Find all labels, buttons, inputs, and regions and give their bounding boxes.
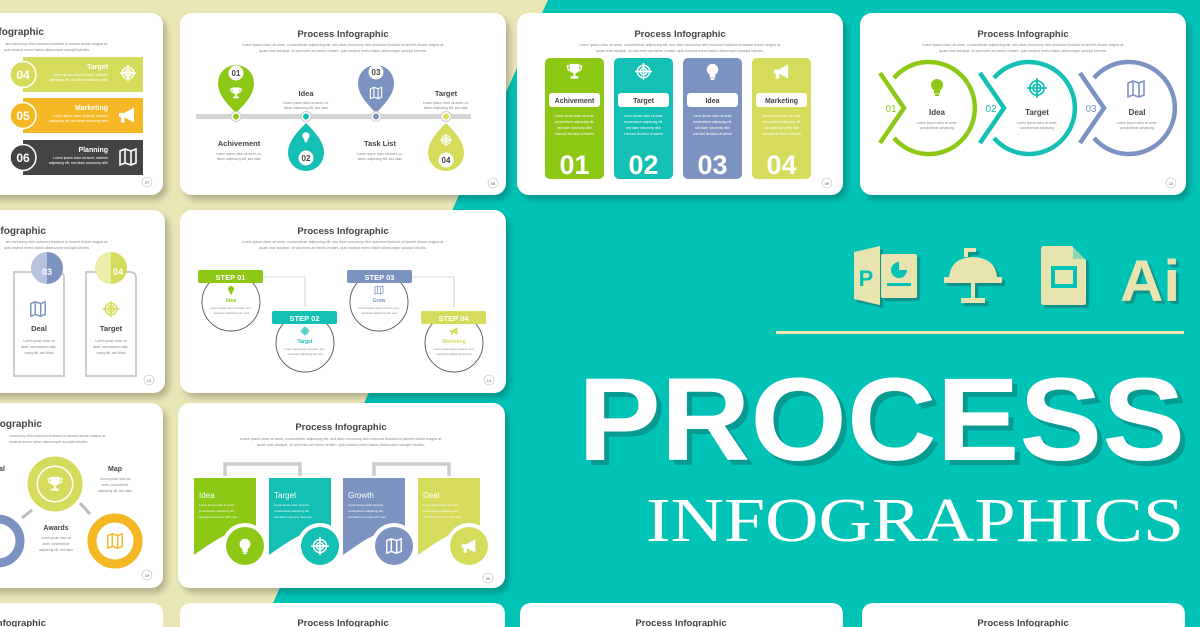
- row: 06 Planning: adipiscing elit, sed diam nonummy nibh: [49, 161, 108, 165]
- card: slide 14 steps: Process Infographic: [297, 226, 389, 237]
- item 04 Target: amet, consectetuer adip-: [93, 345, 129, 349]
- card: slide 09 columns: Lorem ipsum dolor sit amet,: [624, 114, 663, 118]
- pin 01: [218, 65, 254, 113]
- card: slide 10 circles: 01: [885, 104, 897, 115]
- column 02: Target: [633, 98, 655, 105]
- subtitle: INFOGRAPHICS: INFOGRAPHICS: [646, 487, 1184, 555]
- row: 04 Target: adipiscing elit, sed diam nonummy nibh: [49, 78, 108, 82]
- item 04 Target: [86, 252, 136, 376]
- icon: powerpoint: P: [859, 266, 873, 291]
- card: slide 19 (left partial): nostrud exerci tation ullamcorper suscipit lobortis.: [9, 440, 88, 444]
- step 04: STEP 04: [439, 314, 469, 323]
- card: slide 20 panels: Lorem ipsum dolor sit amet,: [348, 503, 384, 507]
- row: 06 Planning: Lorem ipsum dolor sit amet, coletuer: [53, 156, 109, 160]
- card: slide 12 (left partial): quis nostrud exerci tation ullamcorper suscipit lobortis.: [4, 246, 90, 250]
- card: slide 10 circles: [860, 13, 1186, 195]
- row: 04 Target: [10, 57, 143, 92]
- panel Growth: Growth: [348, 491, 374, 500]
- step 03: Grow: [373, 298, 385, 304]
- card: slide 09 columns: Lorem ipsum dolor sit amet,: [555, 114, 594, 118]
- panel Idea: [194, 478, 268, 569]
- step 04: [421, 311, 486, 372]
- row: 06 Planning: 06: [16, 151, 30, 165]
- card: slide 10 circles: Idea: [929, 108, 946, 117]
- icon: google slides: [1041, 246, 1086, 305]
- card: slide 08 timeline: Lorem ipsum dolor sit amet, co-: [357, 152, 403, 156]
- card: slide 10 circles: 10: [1169, 181, 1174, 186]
- card: slide 19 (left partial): amet, consectetuer: [101, 483, 129, 487]
- circle 02 Target: [980, 62, 1075, 154]
- card: slide 12 (left partial): [0, 210, 165, 393]
- step 04: Lorem ipsum dolor sit amet, con-: [434, 347, 474, 351]
- column 01: 01: [559, 150, 590, 180]
- card: slide 19 (left partial): amet, consectetuer: [42, 542, 70, 546]
- card: slide 20 panels: consectetuer adipiscing elit,: [199, 509, 235, 513]
- card: slide 20 panels: consectetuer adipiscing elit,: [348, 509, 384, 513]
- column 02: 02: [628, 150, 659, 180]
- card: slide 10 circles: Deal: [1129, 108, 1145, 117]
- column 01: [545, 58, 604, 180]
- labels: Task List: [364, 139, 396, 148]
- card: slide 20 panels: Process Infographic: [295, 422, 387, 433]
- labels: Target: [435, 89, 458, 98]
- item 03 Deal: 03: [42, 267, 52, 277]
- step 02: Lorem ipsum dolor sit amet, con-: [285, 347, 325, 351]
- card: slide 19 (left partial): adipiscing elit, sed diam: [98, 489, 132, 493]
- card: slide 10 circles: consectetuer adipiscing: [920, 126, 954, 130]
- icon: powerpoint: [854, 246, 917, 305]
- step 01: Idea: [226, 298, 236, 304]
- step 02: Target: [298, 339, 313, 345]
- column 04: 04: [766, 150, 797, 180]
- card: slide 14 steps: [180, 210, 506, 393]
- card: slide 20 panels: sed diam nonummy nibh euis-: [423, 515, 462, 519]
- step 01: sectetuer adipiscing elit, sed: [213, 311, 249, 315]
- card: slide 09 columns: sed diam nonummy nibh: [764, 126, 799, 130]
- step 03: [347, 270, 412, 331]
- card: slide 09 columns: Lorem ipsum dolor sit amet, consectetuer adipiscing elit, sed diam nonummy nibh euismod tincidunt ut laoreet dolore magna al-: [579, 43, 782, 47]
- card: slide 10 circles: Process Infographic: [977, 29, 1069, 40]
- card: slide 10 circles: Lorem ipsum dolor sit amet,: [1017, 121, 1057, 125]
- row: 05 Marketing: adipiscing elit, sed diam nonummy nibh: [49, 119, 108, 123]
- item 03 Deal: Deal: [31, 324, 47, 333]
- row: 06 Planning: [10, 140, 143, 175]
- item 04 Target: 04: [113, 267, 123, 277]
- column 02: [614, 58, 673, 180]
- background: beige left area: [0, 0, 548, 627]
- card: slide 20 panels: [178, 403, 505, 588]
- card: slide 08 timeline: Process Infographic: [297, 29, 389, 40]
- card: slide 19 (left partial): 19: [145, 573, 150, 578]
- labels: Idea: [298, 89, 314, 98]
- card: slide 20 panels: 20: [486, 576, 491, 581]
- card: slide 09 columns: Lorem ipsum dolor sit amet,: [762, 114, 801, 118]
- panel Idea: Idea: [199, 491, 215, 500]
- card: slide 19 (left partial): Map: [108, 466, 122, 473]
- card: slide 14 steps: 14: [487, 378, 492, 383]
- card: slide 20 panels: sed diam nonummy nibh euis-: [199, 515, 238, 519]
- card: slide 08 timeline: quam erat volutpat. Ut wisi enim ad minim veniam, quis nostrud exerci tation ullamcorper suscipit lobortis.: [259, 49, 427, 53]
- row: 06 Planning: Planning: [78, 147, 108, 154]
- card: slide 10 circles: Lorem ipsum dolor sit amet,: [917, 121, 957, 125]
- icon: keynote: [944, 250, 1002, 303]
- card: slide 08 timeline: Lorem ipsum dolor sit amet, co-: [283, 101, 329, 105]
- card: slide 19 (left partial): Awards: [43, 525, 69, 532]
- circle 01 Idea: [880, 62, 975, 154]
- row: 04 Target: Lorem ipsum dolor sit amet, coletuer: [53, 73, 109, 77]
- pin 02: [288, 123, 324, 171]
- card: slide 20 panels: quam erat volutpat. Ut wisi enim ad minim veniam, quis nostrud exerci tation ullamcorper suscipit lobortis.: [257, 443, 425, 447]
- card: slide 09 columns: sed diam nonummy nibh: [695, 126, 730, 130]
- row: 04 Target: Target: [87, 64, 109, 71]
- ring: awards trophy: [32, 461, 78, 507]
- card: slide 14 steps: Lorem ipsum dolor sit amet, consectetuer adipiscing elit, sed diam nonummy nibh euismod tincidunt ut laoreet dolore magna al-: [242, 240, 445, 244]
- card: slide 20 panels: sed diam nonummy nibh euis-: [274, 515, 313, 519]
- panel Target: [269, 478, 343, 569]
- card: slide 20 panels: consectetuer adipiscing elit,: [423, 509, 459, 513]
- card: slide 20 panels: consectetuer adipiscing elit,: [274, 509, 310, 513]
- item 03 Deal: iscing elit, sed diam: [25, 351, 54, 355]
- circle 03 Deal: [1080, 62, 1175, 154]
- row: 04 Target: 04: [16, 68, 30, 82]
- card: slide 09 columns: Process Infographic: [634, 29, 726, 40]
- panel Deal: [418, 478, 492, 569]
- card: slide 10 circles: Lorem ipsum dolor sit amet,: [1117, 121, 1157, 125]
- labels: Achivement: [218, 139, 261, 148]
- divider line: [776, 331, 1184, 334]
- card: slide 19 (left partial): nonummy nibh euismod tincidunt ut laoreet dolore magna al-: [10, 434, 107, 438]
- card: slide 10 circles: consectetuer adipiscing: [1020, 126, 1054, 130]
- row: 05 Marketing: 05: [16, 109, 30, 123]
- card: slide 19 (left partial): [0, 403, 163, 588]
- card: slide 19 (left partial): Lorem ipsum dolor sit: [100, 477, 130, 481]
- step 02: [272, 311, 337, 372]
- card: slide 20 panels: Lorem ipsum dolor sit amet, consectetuer adipiscing elit, sed diam nonummy nibh euismod tincidunt ut laoreet dolore magna al-: [240, 437, 443, 441]
- card: slide 09 columns: euismod tincidunt ut laoreet: [624, 132, 663, 136]
- step 04: Marketing: [442, 339, 466, 345]
- card: slide 07 (left partial): quis nostrud exerci tation ullamcorper suscipit lobortis.: [4, 48, 90, 52]
- software icons: [854, 246, 1180, 314]
- panel Deal: Deal: [423, 491, 440, 500]
- step 01: [198, 270, 263, 331]
- card: slide 08 timeline: tetuer adipiscing elit, sed diam: [358, 157, 402, 161]
- card: slide 10 circles: Target: [1025, 108, 1049, 117]
- card: slide 09 columns: quam erat volutpat. Ut wisi enim ad minim veniam, quis nostrud exerci tation ullamcorper suscipit lobortis.: [596, 49, 764, 53]
- step 03: sectetuer adipiscing elit, sed: [361, 311, 397, 315]
- step 04: sectetuer adipiscing elit, sed: [436, 352, 472, 356]
- pin 03: [358, 64, 394, 113]
- card: slide 10 circles: quam erat volutpat. Ut wisi enim ad minim veniam, quis nostrud exerci tation ullamcorper suscipit lobortis.: [939, 49, 1107, 53]
- card: slide 09 columns: euismod tincidunt ut laoreet: [762, 132, 801, 136]
- card: slide 10 circles: consectetuer adipiscing: [1120, 126, 1154, 130]
- pin 02: 02: [302, 154, 311, 163]
- row: 05 Marketing: Marketing: [75, 105, 108, 112]
- card: slide 09 columns: sed diam nonummy nibh: [557, 126, 592, 130]
- card: slide 12 (left partial): am nonummy nibh euismod tincidunt ut laoreet dolore magna al-: [6, 240, 109, 244]
- card: slide 19 (left partial): Lorem ipsum dolor sit: [41, 536, 71, 540]
- panel Growth: [343, 478, 417, 569]
- card: slide 07 (left partial): 07: [145, 180, 150, 185]
- card: slide 08 timeline: Lorem ipsum dolor sit amet, co-: [216, 152, 262, 156]
- card: slide 08 timeline: tetuer adipiscing elit, sed diam: [217, 157, 261, 161]
- card: slide 09 columns: consectetuer adipiscing elit,: [624, 120, 663, 124]
- panel Target: Target: [274, 491, 297, 500]
- step 01: Lorem ipsum dolor sit amet, con-: [211, 306, 251, 310]
- card: slide 20 panels: sed diam nonummy nibh euis-: [348, 515, 387, 519]
- column 03: 03: [697, 150, 728, 180]
- card: slide 07 (left partial): am nonummy nibh euismod tincidunt ut laoreet dolore magna al-: [6, 42, 109, 46]
- card: slide 09 columns: euismod tincidunt ut laoreet: [555, 132, 594, 136]
- card: slide 08 timeline: 08: [491, 181, 496, 186]
- card: slide 09 columns: [517, 13, 843, 195]
- card: slide 19 (left partial): adipiscing elit, sed diam: [39, 548, 73, 552]
- column 04: Marketing: [765, 98, 798, 105]
- row: 05 Marketing: Lorem ipsum dolor sit amet, coletuer: [53, 114, 109, 118]
- card: slide 08 timeline: [180, 13, 506, 195]
- pin 04: 04: [442, 156, 451, 165]
- card: slide 09 columns: Lorem ipsum dolor sit amet,: [693, 114, 732, 118]
- step 01: STEP 01: [216, 273, 245, 282]
- column 04: [752, 58, 811, 180]
- card: slide 14 steps: quam erat volutpat. Ut wisi enim ad minim veniam, quis nostrud exerci tation ullamcorper suscipit lobortis.: [259, 246, 427, 250]
- row: 05 Marketing: [10, 98, 143, 133]
- pin 01: 01: [232, 69, 241, 78]
- step 02: sectetuer adipiscing elit, sed: [287, 352, 323, 356]
- item 04 Target: iscing elit, sed diam: [97, 351, 126, 355]
- item 04 Target: Target: [100, 324, 123, 333]
- ring: map: [92, 518, 138, 564]
- title: PROCESS: PROCESS: [578, 354, 1185, 486]
- step 03: Lorem ipsum dolor sit amet, con-: [359, 306, 399, 310]
- pin 03: 03: [372, 68, 381, 77]
- card: slide 09 columns: consectetuer adipiscing elit,: [693, 120, 732, 124]
- card: slide 20 panels: Lorem ipsum dolor sit amet,: [199, 503, 235, 507]
- card: slide 09 columns: euismod tincidunt ut laoreet: [693, 132, 732, 136]
- column 03: [683, 58, 742, 180]
- step 03: STEP 03: [365, 273, 394, 282]
- card: slide 08 timeline: Lorem ipsum dolor sit amet, consectetuer adipiscing elit, sed diam nonummy nibh euismod tincidunt ut laoreet dolore magna al-: [242, 43, 445, 47]
- bottom row cards (partial): [0, 603, 1185, 627]
- card: slide 10 circles: 02: [985, 104, 997, 115]
- item 03 Deal: amet, consectetuer adip-: [21, 345, 57, 349]
- card: slide 07 (left partial): [0, 13, 163, 195]
- ring: partial blue: [0, 519, 20, 563]
- item 03 Deal: [14, 252, 64, 376]
- card: slide 10 circles: Lorem ipsum dolor sit amet, consectetuer adipiscing elit, sed diam nonummy nibh euismod tincidunt ut laoreet dolore magna al-: [922, 43, 1125, 47]
- card: slide 08 timeline: Lorem ipsum dolor sit amet, co-: [423, 101, 469, 105]
- card: slide 08 timeline: tetuer adipiscing elit, sed diam: [284, 106, 328, 110]
- labels: [218, 89, 458, 148]
- step 02: STEP 02: [290, 314, 319, 323]
- item 04 Target: Lorem ipsum dolor sit: [95, 339, 127, 343]
- column 03: Idea: [705, 98, 720, 105]
- card: slide 20 panels: Lorem ipsum dolor sit amet,: [274, 503, 310, 507]
- icon: illustrator Ai: Ai: [1120, 249, 1180, 314]
- pin 04: [428, 123, 464, 171]
- item 03 Deal: Lorem ipsum dolor sit: [23, 339, 55, 343]
- card: slide 09 columns: 09: [825, 181, 830, 186]
- card: slide 08 timeline: tetuer adipiscing elit, sed diam: [424, 106, 468, 110]
- card: slide 09 columns: sed diam nonummy nibh: [626, 126, 661, 130]
- card: slide 20 panels: Lorem ipsum dolor sit amet,: [423, 503, 459, 507]
- card: slide 09 columns: consectetuer adipiscing elit,: [762, 120, 801, 124]
- card: slide 12 (left partial): 12: [147, 378, 152, 383]
- title: PROCESS: PROCESS: [583, 359, 1190, 491]
- card: slide 10 circles: 03: [1085, 104, 1097, 115]
- column 01: Achivement: [555, 98, 595, 105]
- card: slide 09 columns: consectetuer adipiscing elit,: [555, 120, 594, 124]
